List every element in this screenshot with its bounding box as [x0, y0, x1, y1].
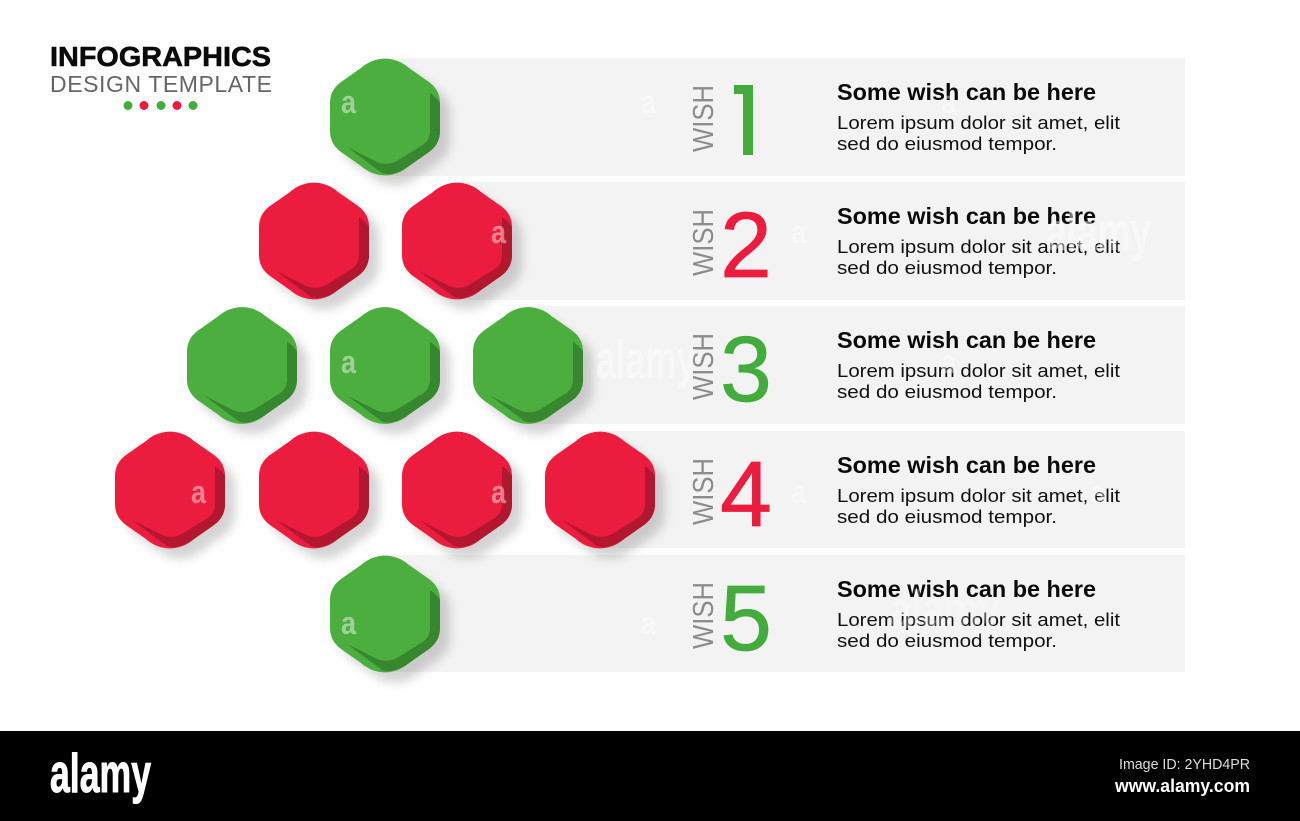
hexagon: row 5 green — [330, 556, 450, 682]
website: www.alamy.com — [1114, 776, 1250, 796]
panel: wish 5 background — [385, 555, 1185, 672]
stock watermark letters: a — [1091, 474, 1106, 510]
footer bar — [0, 731, 1300, 821]
wish 4 body: sed do eiusmod tempor. — [837, 507, 1057, 527]
wish 3 body — [837, 361, 1120, 402]
stock watermark letters: a — [341, 84, 356, 120]
wish 1 label: WISH — [688, 85, 720, 152]
hexagon: row 3 green left — [187, 307, 307, 434]
wish 4 content — [688, 442, 1120, 546]
wish 5 content — [688, 566, 1120, 670]
panel: wish 4 background — [600, 431, 1185, 548]
wish 4 label: WISH — [688, 458, 720, 525]
wish 2 body: sed do eiusmod tempor. — [837, 258, 1057, 278]
wish 1 body — [837, 113, 1120, 154]
wish 2 body — [837, 237, 1120, 278]
hexagon: row 2 red left — [259, 183, 379, 309]
stock watermark letters: alamy — [890, 580, 1000, 640]
stock watermark letters: a — [191, 474, 206, 510]
stock watermark letters: alamy — [1046, 202, 1151, 262]
panel: wish 1 background — [385, 58, 1185, 176]
stock watermark letters: a — [791, 214, 806, 250]
image id: Image ID: 2YHD4PR — [1119, 756, 1250, 773]
panel: wish 3 background — [528, 306, 1185, 424]
wish 1 number: 1 — [720, 71, 772, 175]
wish 3 content — [688, 317, 1120, 421]
stock watermark letters: a — [791, 474, 806, 510]
panel: wish 2 background — [457, 182, 1185, 300]
wish 3 heading: Some wish can be here — [837, 327, 1096, 353]
wish 4 body — [837, 486, 1120, 527]
stock watermark letters: a — [341, 344, 356, 380]
wish 2 label: WISH — [688, 209, 720, 276]
stock watermark letters: alamy — [596, 330, 696, 390]
wish 5 label: WISH — [688, 582, 720, 649]
wish 1 content — [692, 83, 1120, 155]
stock watermark letters: a — [341, 605, 356, 641]
wish 3 body: sed do eiusmod tempor. — [837, 382, 1057, 402]
stock watermark letters: a — [641, 605, 656, 641]
wish 5 body: Lorem ipsum dolor sit amet, elit — [837, 610, 1120, 630]
wish 5 number: 5 — [720, 566, 772, 670]
hexagon: row 3 green centre — [330, 307, 450, 434]
heading: INFOGRAPHICS — [50, 41, 271, 72]
hexagon: row 4 red fourth — [545, 432, 665, 558]
stock watermark letters: a — [491, 214, 506, 250]
wish 5 body — [837, 610, 1120, 651]
wish 4 number: 4 — [720, 442, 772, 546]
wish 1 heading: Some wish can be here — [837, 79, 1096, 105]
stock watermark letters — [191, 84, 1151, 641]
stock watermark letters: a — [941, 344, 956, 380]
wish 4 heading: Some wish can be here — [837, 452, 1096, 478]
wish 3 number: 3 — [720, 317, 772, 421]
stock watermark letters: a — [941, 84, 956, 120]
alamy logo: alamy — [50, 742, 151, 804]
hexagon: row 4 red second — [259, 432, 379, 558]
stock watermark letters: a — [491, 474, 506, 510]
wish 1 body: Lorem ipsum dolor sit amet, elit — [837, 113, 1120, 133]
hexagon: row 2 red right — [402, 183, 522, 309]
wish 3 label: WISH — [688, 333, 720, 400]
wish 4 body: Lorem ipsum dolor sit amet, elit — [837, 486, 1120, 506]
wish 2 body: Lorem ipsum dolor sit amet, elit — [837, 237, 1120, 257]
hexagon: row 1 green — [330, 59, 450, 185]
wish 2 content — [688, 193, 1120, 297]
hexagon: row 4 red first — [115, 432, 235, 558]
wish 5 body: sed do eiusmod tempor. — [837, 631, 1057, 651]
decorative dots — [124, 101, 198, 110]
wish 2 number: 2 — [720, 193, 772, 297]
wish 5 heading: Some wish can be here — [837, 576, 1096, 602]
subheading: DESIGN TEMPLATE — [50, 71, 272, 97]
wish 2 heading: Some wish can be here — [837, 203, 1096, 229]
title block — [50, 41, 272, 110]
hexagon: row 3 green right — [473, 307, 593, 434]
wish 1 body: sed do eiusmod tempor. — [837, 134, 1057, 154]
stock watermark letters: a — [641, 84, 656, 120]
wish 3 body: Lorem ipsum dolor sit amet, elit — [837, 361, 1120, 381]
wish 1 number — [734, 85, 753, 155]
hexagon: row 4 red third — [402, 432, 522, 558]
